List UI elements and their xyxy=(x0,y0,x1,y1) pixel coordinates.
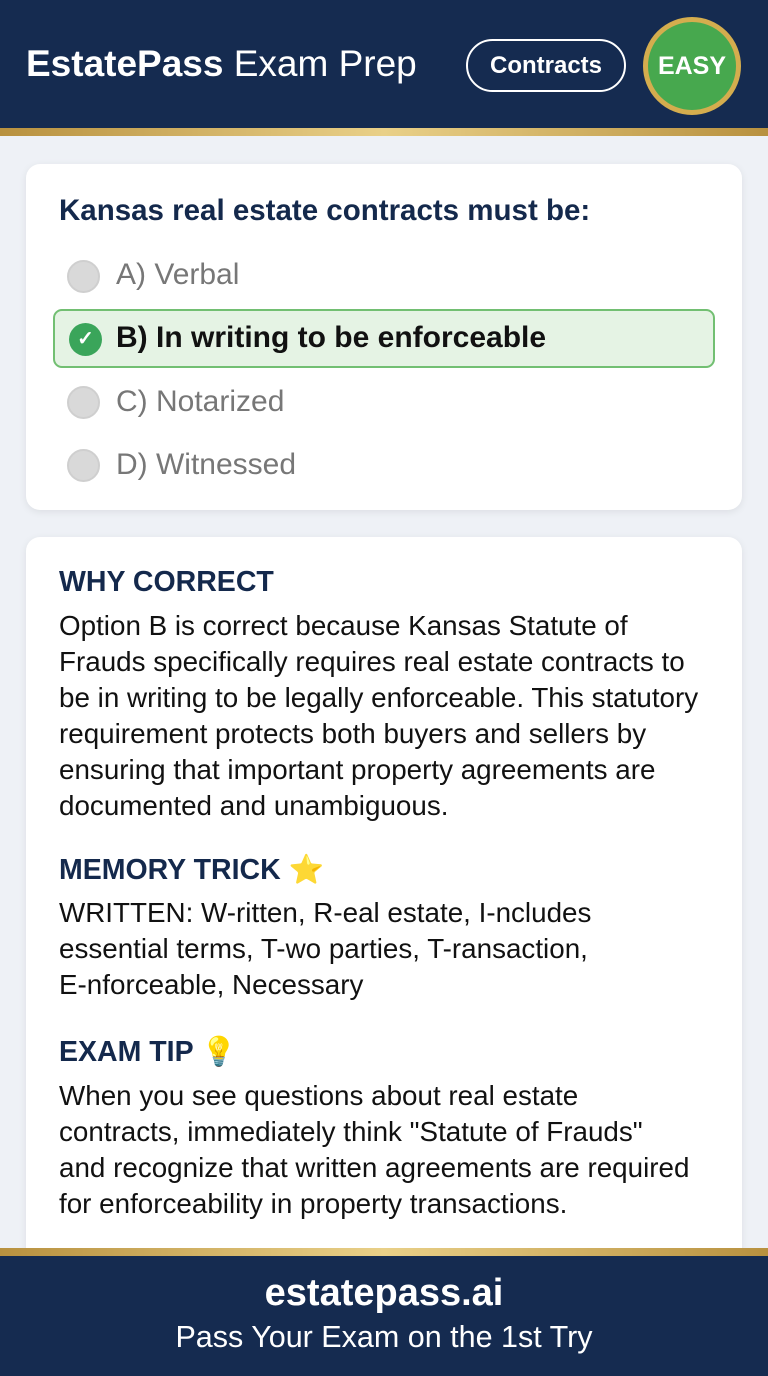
text: exam tip: for enforceability in property transactions. xyxy=(59,1188,567,1219)
difficulty badge: EASY: EASY xyxy=(658,52,726,80)
option B correct xyxy=(53,309,715,368)
text: why correct: requirement protects both buyers and sellers by xyxy=(59,718,646,749)
icon: check: ✓ xyxy=(77,328,94,350)
text: exam tip: When you see questions about real estate xyxy=(59,1080,578,1111)
text: exam tip: contracts, immediately think "Statute of Frauds" xyxy=(59,1116,643,1147)
heading: memory trick: MEMORY TRICK ⭐ xyxy=(59,854,324,886)
text: memory trick: essential terms, T-wo parties, T-ransaction, xyxy=(59,933,588,964)
panel: explanation xyxy=(26,537,742,1297)
footer tagline: Pass Your Exam on the 1st Try xyxy=(175,1320,593,1354)
text: memory trick xyxy=(59,897,591,1000)
option A: A) Verbal xyxy=(116,258,239,291)
text: exam tip xyxy=(59,1080,689,1219)
text: why correct: documented and unambiguous. xyxy=(59,790,448,821)
text: why correct: ensuring that important property agreements are xyxy=(59,754,655,785)
icon: check xyxy=(69,323,102,356)
category pill: Contracts xyxy=(466,39,626,92)
footer xyxy=(0,1256,768,1376)
category pill: Contracts: Contracts xyxy=(490,52,602,79)
option D: D) Witnessed xyxy=(116,448,296,481)
text: memory trick: WRITTEN: W-ritten, R-eal estate, I-ncludes xyxy=(59,897,591,928)
header xyxy=(0,0,768,128)
question heading: Kansas real estate contracts must be: xyxy=(59,194,590,227)
option A xyxy=(67,258,239,293)
text: memory trick: E-nforceable, Necessary xyxy=(59,969,363,1000)
footer site name: estatepass.ai xyxy=(265,1272,503,1314)
difficulty badge: EASY xyxy=(643,17,741,115)
option B correct: B) In writing to be enforceable xyxy=(116,321,546,354)
panel: question xyxy=(26,164,742,510)
header title: EstatePass Exam Prep xyxy=(26,43,417,84)
heading: exam tip: EXAM TIP 💡 xyxy=(59,1036,236,1068)
text: why correct: Option B is correct because Kansas Statute of xyxy=(59,610,628,641)
option C: C) Notarized xyxy=(116,385,284,418)
text: why correct: Frauds specifically requires real estate contracts to xyxy=(59,646,685,677)
heading: why correct: WHY CORRECT xyxy=(59,566,274,598)
text: why correct xyxy=(59,610,698,821)
text: exam tip: and recognize that written agreements are required xyxy=(59,1152,689,1183)
text: why correct: be in writing to be legally enforceable. This statutory xyxy=(59,682,698,713)
